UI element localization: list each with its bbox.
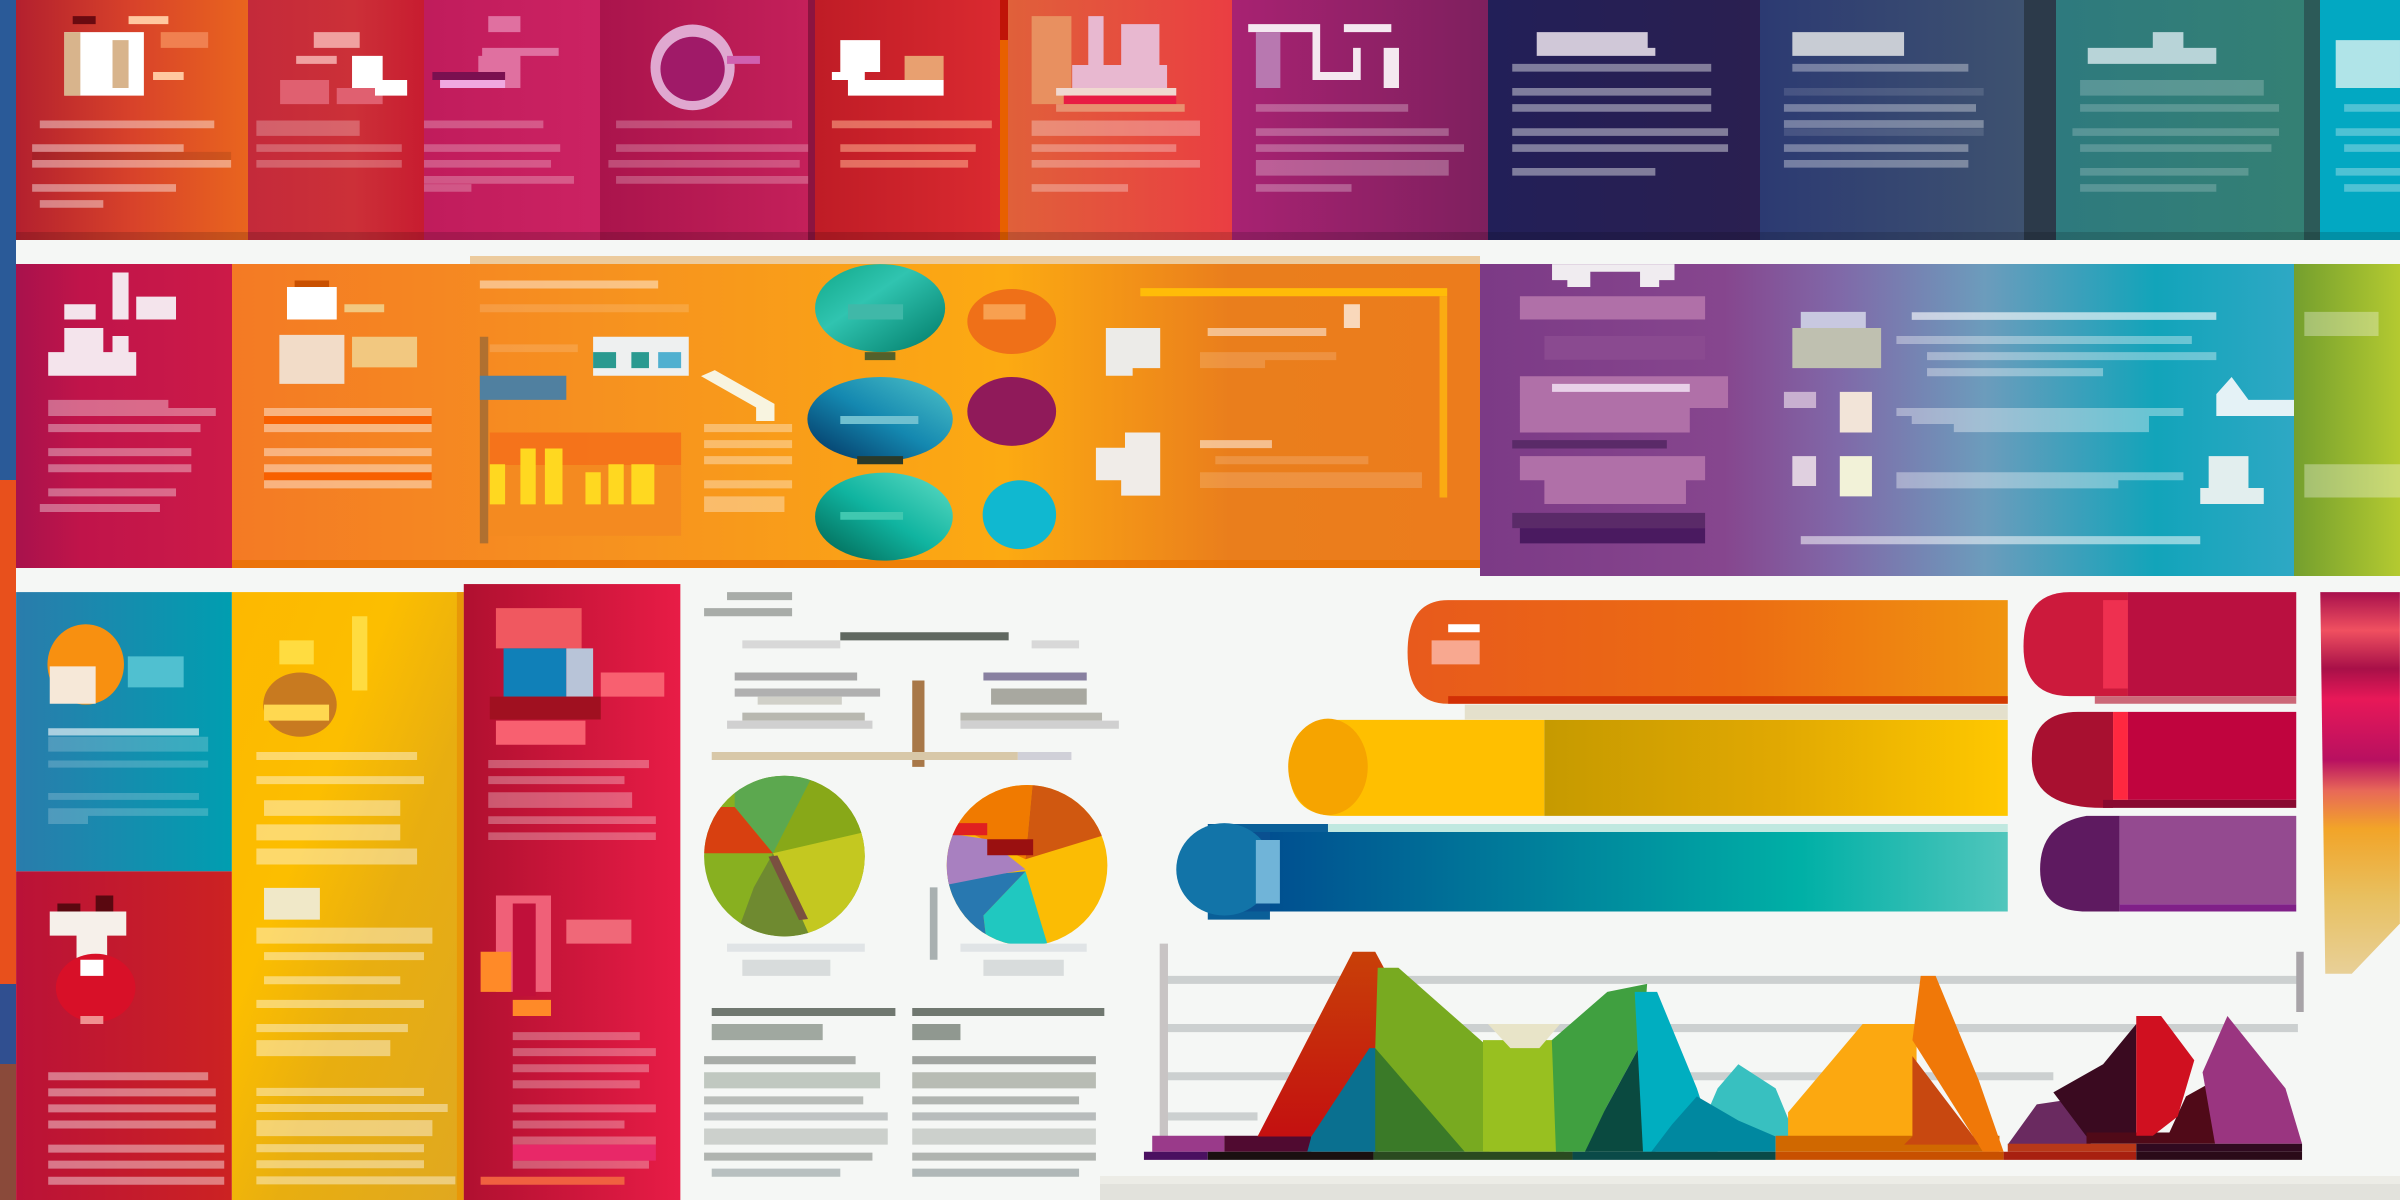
text: right column (1912, 312, 2216, 320)
bottom floor band (1100, 1176, 2400, 1200)
panel: yellow (232, 592, 464, 1200)
panel: red (16, 871, 232, 1200)
peak: tall orange (1912, 976, 2004, 1152)
chart: green pie (704, 776, 865, 936)
panel: top 6 (1008, 0, 1232, 240)
panel: teal (16, 592, 232, 871)
icon: sun globe (47, 624, 184, 705)
left edge strip (0, 0, 16, 1200)
text block: left note (727, 672, 880, 729)
icon: cream tiles (1784, 392, 1872, 496)
text column 2 (912, 1008, 1104, 1177)
peak: mid green (1552, 984, 1647, 1152)
chart: bar chart (480, 281, 689, 543)
diagram: cyan bubble (983, 480, 1056, 549)
panel: top 3 (424, 0, 600, 240)
text block: right note (960, 672, 1119, 729)
text column 1 (704, 1008, 895, 1177)
panel: top 2 (248, 0, 424, 240)
diagram: orange bubble (967, 289, 1056, 354)
card stack (1512, 264, 1728, 543)
peak: purple mid (2008, 1096, 2091, 1145)
connector: T-bracket (712, 680, 1071, 767)
tag: crimson 1 (2024, 592, 2296, 704)
white report area (689, 592, 1119, 1177)
peak: magenta (2203, 1016, 2302, 1144)
icon: beige clipboard (1792, 312, 1881, 368)
panel: top 10 (2056, 0, 2320, 240)
tag: crimson 2 (2032, 712, 2296, 808)
diagram: purple bubble (967, 377, 1056, 446)
icon: cream box (264, 888, 320, 920)
panel: top 4 (600, 0, 815, 240)
panel: top 1 (16, 0, 248, 240)
bar: orange (1408, 600, 2008, 704)
top row of panels (16, 0, 2400, 240)
peak: amber (1788, 1024, 1917, 1137)
text: orange column (264, 416, 432, 480)
icon: white tower (2200, 456, 2264, 504)
panel: top 11 (2320, 0, 2400, 240)
peak: maroon (2087, 1080, 2215, 1144)
side strip: stacked layers (2320, 592, 2400, 974)
panel: green (2294, 264, 2400, 576)
icon: tall flag (481, 895, 631, 1016)
base: orange (1776, 1136, 1999, 1152)
peak: dark plum (2053, 1024, 2136, 1137)
peak: green (1375, 968, 1490, 1152)
bottom-left column panels (16, 584, 680, 1200)
panel: top 5 (815, 0, 1008, 240)
peak: bright red (2136, 1016, 2194, 1136)
panel: top 8 (1488, 0, 1760, 240)
horizontal bars and side tags (1176, 592, 2400, 974)
icon: white and red heart shape (50, 895, 135, 1024)
bar: blue teal (1176, 823, 2008, 920)
panel: crimson tall (464, 584, 680, 1200)
peak: lime (1483, 1040, 1564, 1152)
peak: red (1258, 952, 1386, 1137)
peak: cyan (1635, 992, 1718, 1152)
band under orange bar (1465, 705, 2008, 719)
bar: yellow (1288, 719, 2008, 816)
icon: blue dome (490, 608, 664, 745)
icon: flame and stick (263, 616, 367, 737)
peak: dark green (1375, 1048, 1465, 1152)
icon: white tag 1 (1106, 328, 1160, 376)
panel: top 7 (1232, 0, 1488, 240)
chart: area peaks (1144, 944, 2304, 1160)
icon: crimson chart marks (48, 272, 176, 376)
middle row of panels (16, 256, 2400, 576)
peak: dark teal (1585, 1040, 1655, 1152)
heading: small label (704, 592, 792, 616)
peak: light cyan (1697, 1064, 1792, 1137)
peak: blue teal (1651, 1096, 1776, 1152)
panel: purple to teal (1480, 264, 2294, 576)
chart: multicolour pie (946, 785, 1108, 944)
chart base strip (1144, 1144, 2302, 1160)
peak: rust (1904, 1056, 1979, 1145)
arrow: white trend line (708, 373, 765, 421)
callout: frame with text (1140, 288, 1447, 498)
panel: crimson (16, 264, 232, 568)
icon: person bust (279, 335, 344, 384)
diagram: green-teal bubble (815, 473, 953, 561)
pie captions (727, 887, 1087, 976)
icon: white tag 2 (1096, 432, 1160, 496)
diagram: blue bubble (807, 377, 953, 464)
valley: beige (1488, 1024, 1560, 1048)
panel: orange main (232, 256, 1480, 568)
heading: chart title (742, 632, 1079, 648)
peak: teal left (1307, 1048, 1378, 1152)
chart grid (1160, 944, 2304, 1145)
top row shadow base (16, 232, 2400, 240)
panel: top 9 (1760, 0, 2056, 240)
tag: purple (2040, 816, 2296, 912)
icon: white house (2216, 377, 2294, 416)
diagram: teal bubble (815, 264, 945, 360)
